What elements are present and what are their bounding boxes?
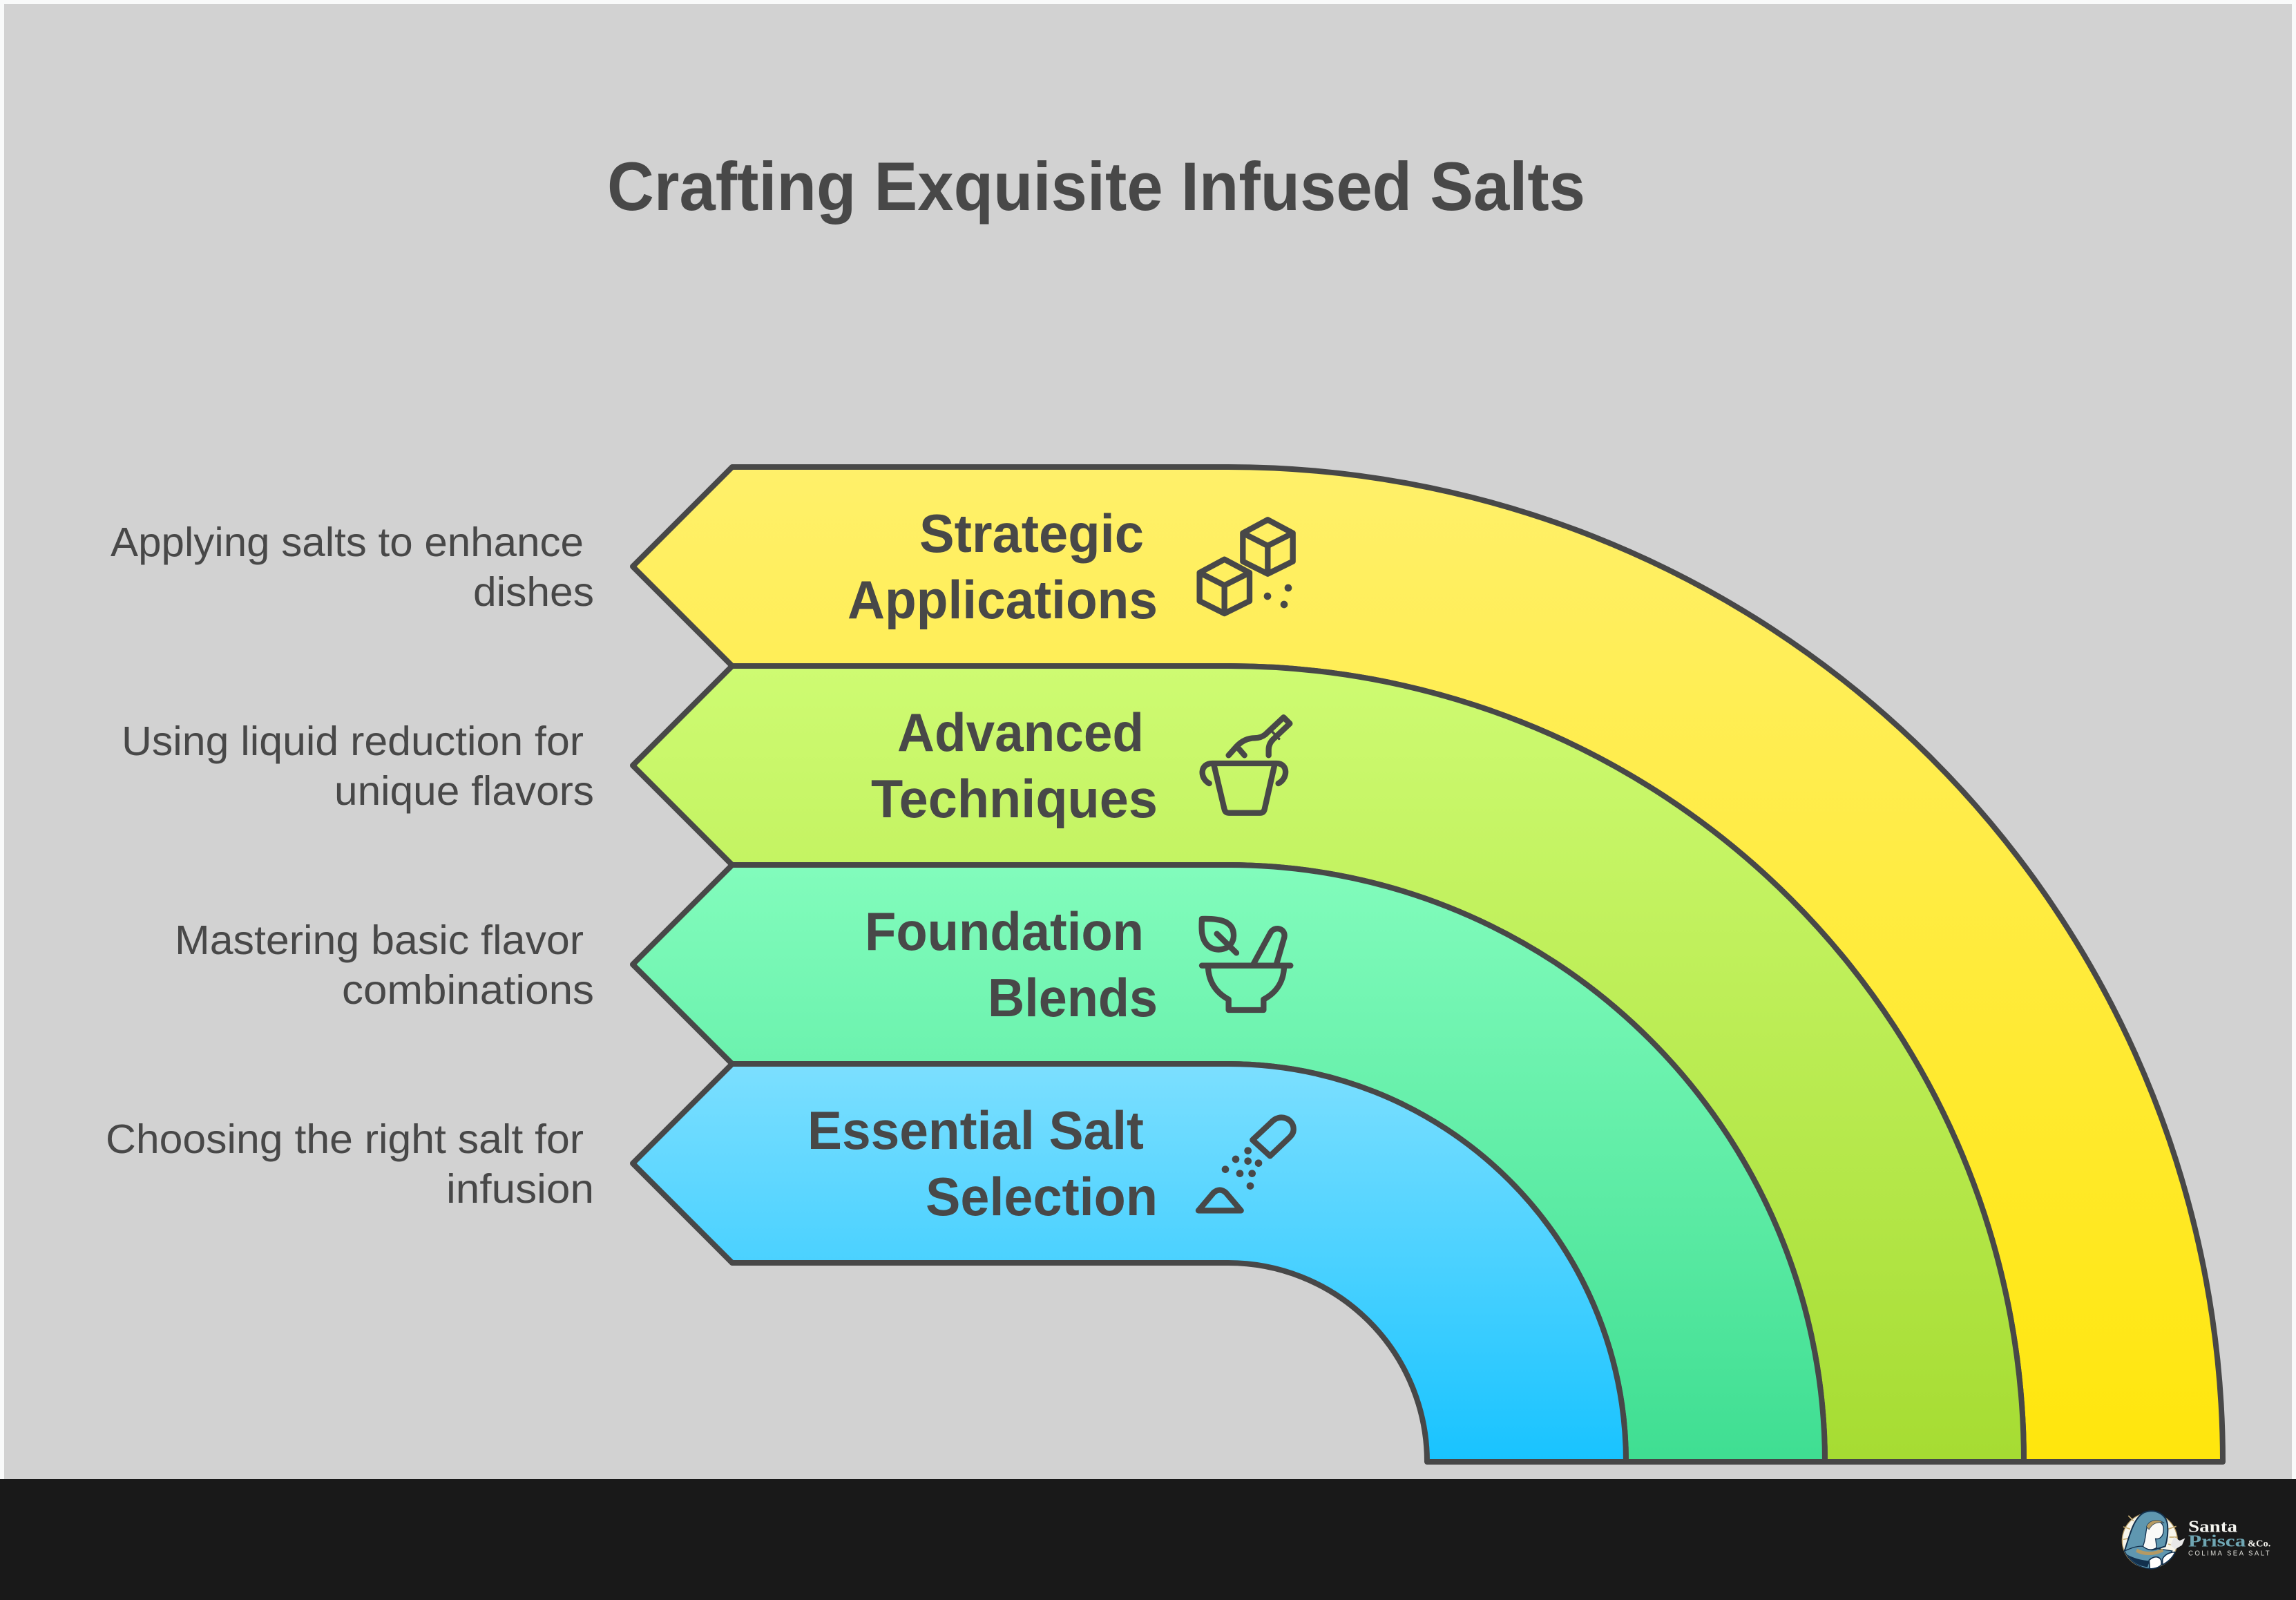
band label: Foundation Blends <box>865 901 1158 1028</box>
description: choosing salt: infusion <box>446 1166 594 1212</box>
description: choosing salt <box>106 1116 594 1212</box>
band: Strategic Applications <box>633 467 2223 1462</box>
band label: Essential Salt Selection <box>807 1100 1158 1227</box>
band: Essential Salt Selection <box>633 1064 1626 1462</box>
description: applying salts: Applying salts to enhance <box>111 520 584 565</box>
logo wordmark: Santa <box>2188 1518 2237 1536</box>
band: Foundation Blends <box>633 865 1825 1462</box>
band label: Foundation Blends: Foundation <box>865 901 1144 962</box>
icon: mortar and herb <box>1202 919 1290 1010</box>
logo wordmark <box>2188 1518 2270 1558</box>
logo wordmark: &Co. <box>2248 1538 2270 1548</box>
description: liquid reduction <box>122 718 594 814</box>
icon: salt shaker <box>1198 1118 1294 1210</box>
band: Advanced Techniques <box>633 666 2024 1462</box>
footer bar <box>0 1479 2296 1600</box>
description: liquid reduction: unique flavors <box>334 768 594 814</box>
band label: Strategic Applications: Applications <box>848 569 1158 630</box>
description: liquid reduction: Using liquid reduction for <box>122 718 584 764</box>
title: Crafting Exquisite Infused Salts <box>607 148 1585 225</box>
band label: Advanced Techniques <box>871 702 1158 829</box>
description: flavor combinations: Mastering basic flavor <box>175 917 584 963</box>
band label: Strategic Applications: Strategic <box>919 503 1144 564</box>
logo emblem <box>2122 1511 2185 1569</box>
band label: Advanced Techniques: Advanced <box>897 702 1144 763</box>
icon: bottle in bucket <box>1203 717 1290 813</box>
logo wordmark: Prisca <box>2188 1532 2246 1550</box>
description: flavor combinations <box>175 917 594 1013</box>
description: applying salts <box>111 520 594 615</box>
description: applying salts: dishes <box>473 569 594 615</box>
band label: Essential Salt Selection: Essential Salt <box>807 1100 1144 1161</box>
logo: Santa Prisca & Co. <box>2122 1511 2270 1569</box>
band label: Foundation Blends: Blends <box>988 967 1158 1028</box>
band label: Strategic Applications <box>848 503 1158 630</box>
logo wordmark: COLIMA SEA SALT <box>2188 1550 2270 1558</box>
description: choosing salt: Choosing the right salt for <box>106 1116 584 1162</box>
description: flavor combinations: combinations <box>342 967 594 1013</box>
icon: salt cubes <box>1200 520 1293 613</box>
band label: Essential Salt Selection: Selection <box>926 1166 1158 1227</box>
band label: Advanced Techniques: Techniques <box>871 768 1158 829</box>
